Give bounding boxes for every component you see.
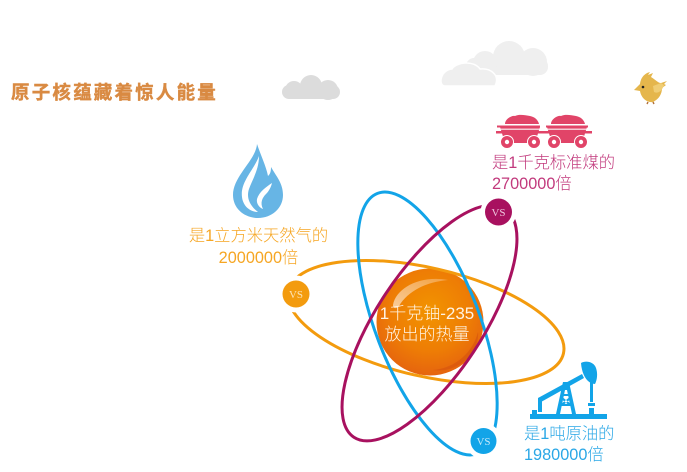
label: natural gas: 2000000倍	[219, 248, 298, 266]
icon: coal carts	[496, 115, 592, 148]
orbit: orange	[276, 238, 576, 406]
label: standard coal: 2700000倍	[492, 174, 572, 192]
sphere: core	[376, 268, 484, 376]
icon: gas flame drop	[233, 144, 283, 218]
cloud: pale large	[466, 41, 548, 76]
orbit: magenta	[310, 180, 549, 466]
cloud: grey left	[282, 75, 340, 100]
label: standard coal: 是1千克标准煤的	[492, 154, 615, 172]
label: oil: 是1吨原油的	[524, 425, 614, 443]
label: oil: 1980000倍	[524, 446, 604, 464]
title: 原子核蕴藏着惊人能量	[11, 82, 218, 103]
VS badge: magenta: VS	[491, 207, 506, 219]
label: natural gas	[189, 226, 328, 266]
VS badge: blue: VS	[476, 436, 491, 448]
label: uranium core	[380, 304, 474, 344]
VS badge: magenta	[480, 194, 516, 230]
label: uranium core: 1千克铀-235	[380, 304, 474, 323]
label: uranium core: 放出的热量	[384, 325, 470, 344]
icon: bird	[634, 72, 667, 104]
VS badge: blue	[466, 423, 502, 459]
orbit: blue	[329, 175, 526, 472]
label: oil	[524, 424, 614, 464]
VS badge: orange: VS	[289, 289, 303, 301]
label: natural gas: 是1立方米天然气的	[189, 227, 328, 245]
label: standard coal	[492, 154, 615, 192]
icon: oil pump	[530, 362, 607, 419]
cloud: pale small	[441, 63, 497, 86]
VS badge: orange	[278, 276, 314, 312]
